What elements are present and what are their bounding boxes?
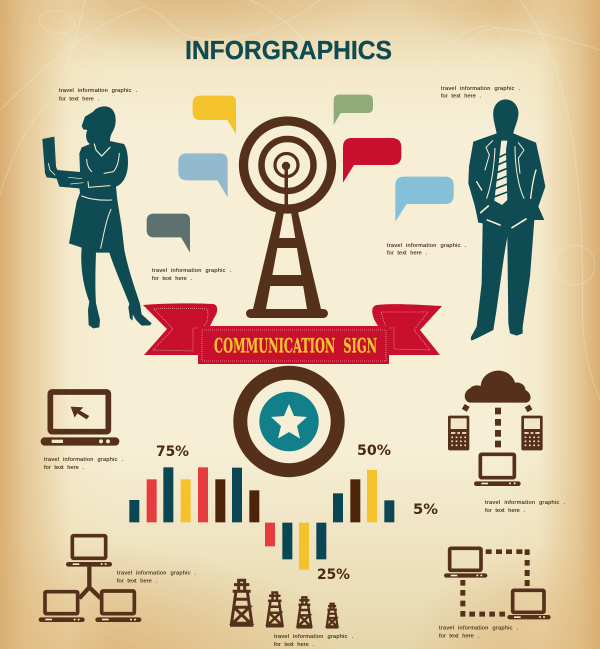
label 75%: 75% <box>156 444 189 460</box>
text: network: for text here . <box>117 578 157 584</box>
text: towers: for text here . <box>274 642 314 648</box>
icon: laptop with cursor <box>41 392 119 446</box>
ribbon left tail <box>143 303 217 355</box>
ribbon banner <box>143 303 442 364</box>
text: towers <box>274 634 353 648</box>
text block: under speech bubbles: travel information graphic . <box>152 268 231 274</box>
speech bubble: red <box>343 138 401 183</box>
text: cloud: for text here . <box>485 508 525 514</box>
label 50%: 50% <box>357 443 391 459</box>
right phone <box>521 416 543 450</box>
radio tower icon <box>244 121 332 318</box>
text block: beside man: for text here . <box>387 250 427 256</box>
text: towers: travel information graphic . <box>274 634 353 640</box>
text: cloud <box>485 500 565 514</box>
text: cloud: travel information graphic . <box>485 500 565 506</box>
text: laptop <box>44 457 123 471</box>
text: linked laptops <box>439 626 518 640</box>
icon: laptop network <box>39 536 141 622</box>
speech bubble: light blue <box>395 177 454 222</box>
text block: beside man: travel information graphic . <box>387 243 466 249</box>
speech bubble: gray <box>147 214 190 253</box>
tower 2 <box>266 592 284 626</box>
label 25%: 25% <box>317 567 350 583</box>
text block: top right: for text here . <box>441 94 481 100</box>
text: linked laptops: for text here . <box>439 634 479 640</box>
striped tie <box>494 141 507 205</box>
tower 3 <box>297 597 312 628</box>
left phone <box>448 416 469 450</box>
tower 4 <box>326 604 338 628</box>
text: laptop: travel information graphic . <box>44 457 123 463</box>
laptop <box>480 454 514 478</box>
text block: top left: for text here . <box>59 96 99 102</box>
text: laptop: for text here . <box>44 465 84 471</box>
text block: under speech bubbles: for text here . <box>152 276 192 282</box>
text: network: travel information graphic . <box>117 570 196 576</box>
text block: under speech bubbles <box>152 268 231 282</box>
text: network <box>117 570 196 584</box>
speech bubble: yellow <box>193 96 236 134</box>
bar chart <box>129 467 394 570</box>
label 5%: 5% <box>413 502 438 518</box>
ribbon right tail <box>372 304 442 355</box>
tower 1 <box>230 580 253 626</box>
cloud <box>465 371 531 403</box>
text block: beside man <box>387 243 466 256</box>
title: INFORGRAPHICS <box>185 37 392 65</box>
speech bubble: blue <box>178 153 228 197</box>
icon: linked laptops <box>444 548 551 619</box>
text: linked laptops: travel information graphic . <box>439 626 518 632</box>
speech bubble: green <box>334 95 373 125</box>
target icon with star <box>240 373 338 470</box>
text block: top left <box>59 88 137 102</box>
woman with laptop silhouette <box>42 106 152 328</box>
text block: top right <box>441 86 520 100</box>
man silhouette <box>468 99 545 341</box>
ribbon label: COMMUNICATION SIGN <box>214 334 377 358</box>
text block: top left: travel information graphic . <box>59 88 137 94</box>
icon: cloud with phones and laptop <box>448 371 543 486</box>
icon: four transmission towers <box>230 580 338 628</box>
text block: top right: travel information graphic . <box>441 86 520 92</box>
